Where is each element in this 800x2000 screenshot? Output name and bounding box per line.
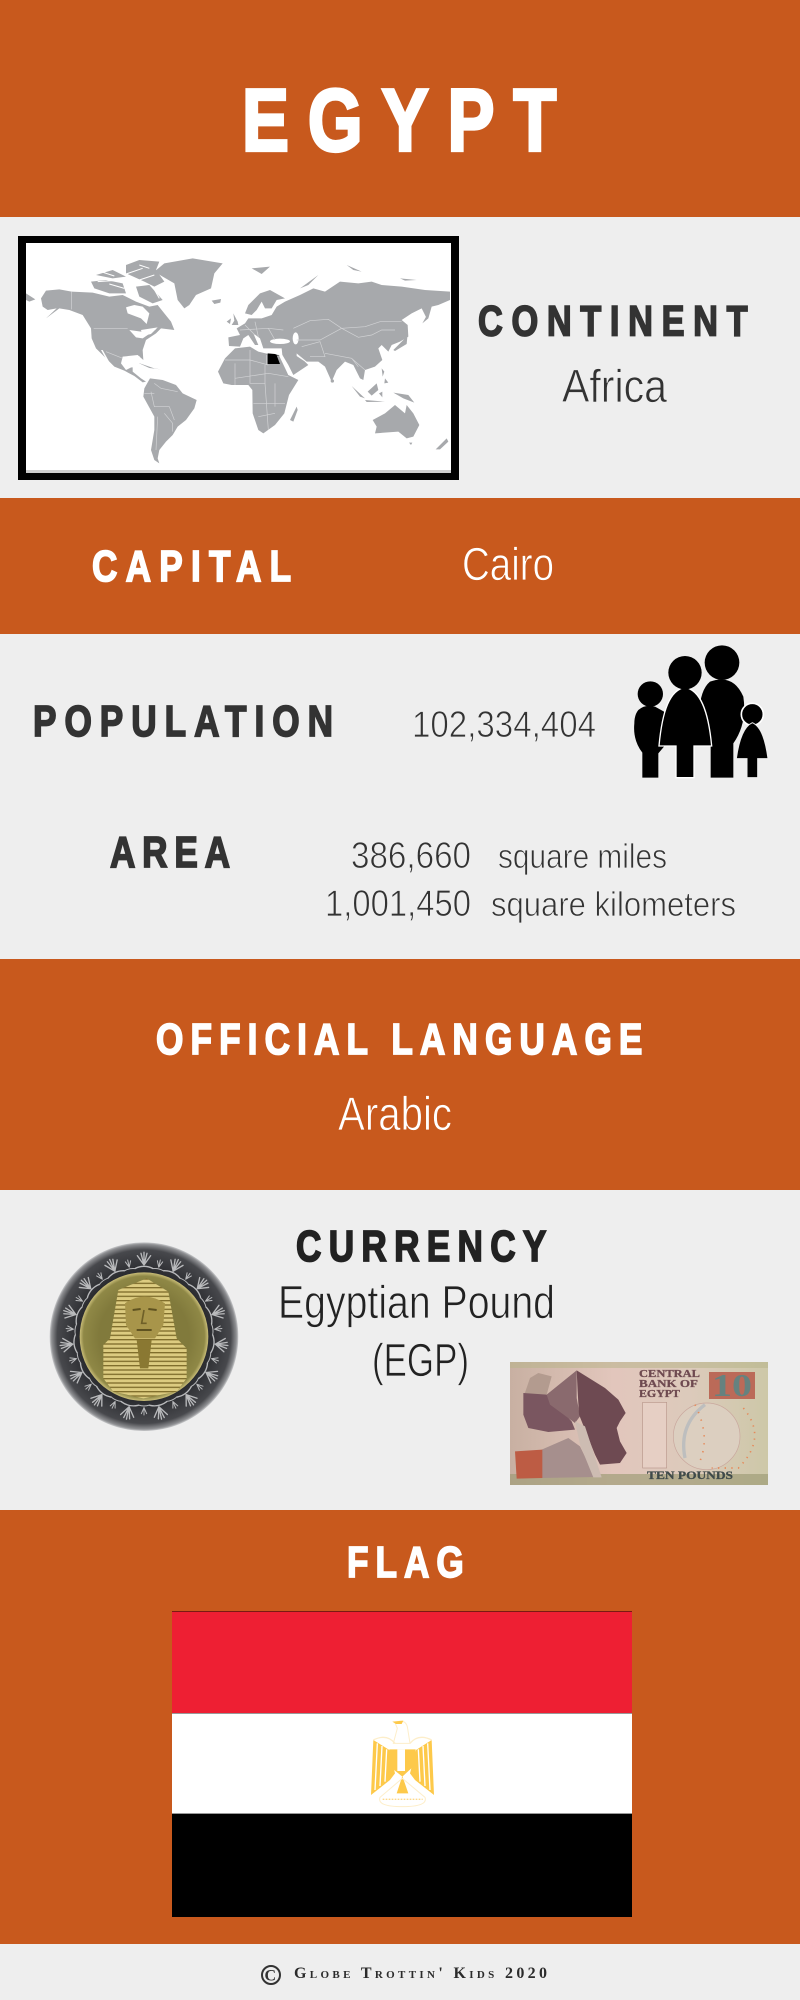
panel: official language xyxy=(0,959,800,1190)
panel: footer xyxy=(0,1944,800,2000)
icon: banknote: BANK OF xyxy=(639,1378,698,1390)
header band xyxy=(0,0,800,217)
icon: banknote: TEN POUNDS xyxy=(647,1468,733,1482)
value: area in square miles: 386,660 xyxy=(351,835,471,876)
footer credit: Globe Trottin' Kids 2020 xyxy=(294,1965,547,1982)
heading: official language: OFFICIAL LANGUAGE xyxy=(156,1015,642,1064)
icon: family xyxy=(634,645,768,778)
value: currency code: (EGP) xyxy=(372,1334,469,1386)
panel: continent xyxy=(0,217,800,498)
value: population: 102,334,404 xyxy=(412,704,596,745)
value: continent: Africa xyxy=(562,360,667,412)
panel: currency xyxy=(0,1190,800,1510)
value: area in square miles: square miles xyxy=(498,838,667,876)
heading: continent: CONTINENT xyxy=(478,298,748,345)
panel: population and area xyxy=(0,634,800,959)
value: area in square miles xyxy=(351,835,667,876)
flag of Egypt xyxy=(172,1611,632,1917)
value: capital: Cairo xyxy=(462,538,554,590)
title: EGYPT xyxy=(242,71,556,169)
heading: flag: FLAG xyxy=(347,1538,464,1587)
Egypt highlight xyxy=(268,353,280,364)
world map xyxy=(18,236,459,480)
icon: copyright xyxy=(262,1966,280,1984)
icon: coin xyxy=(50,1242,238,1431)
value: area in square kilometers: square kilometers xyxy=(491,886,736,924)
value: currency name: Egyptian Pound xyxy=(278,1276,555,1328)
icon: banknote: CENTRAL xyxy=(639,1368,700,1380)
icon: eagle emblem xyxy=(371,1721,434,1807)
panel: capital xyxy=(0,498,800,634)
heading: population: POPULATION xyxy=(33,697,333,746)
heading: currency: CURRENCY xyxy=(296,1222,546,1271)
icon: copyright: C xyxy=(264,1968,276,1984)
value: area in square kilometers: 1,001,450 xyxy=(325,883,471,924)
icon: banknote xyxy=(510,1362,768,1485)
value: area in square kilometers xyxy=(325,883,736,924)
heading: capital: CAPITAL xyxy=(92,542,291,591)
heading: area: AREA xyxy=(110,828,230,877)
panel: flag xyxy=(0,1510,800,1944)
icon: banknote: EGYPT xyxy=(639,1388,681,1400)
icon: banknote: 10 xyxy=(712,1367,752,1403)
value: language: Arabic xyxy=(338,1087,452,1140)
